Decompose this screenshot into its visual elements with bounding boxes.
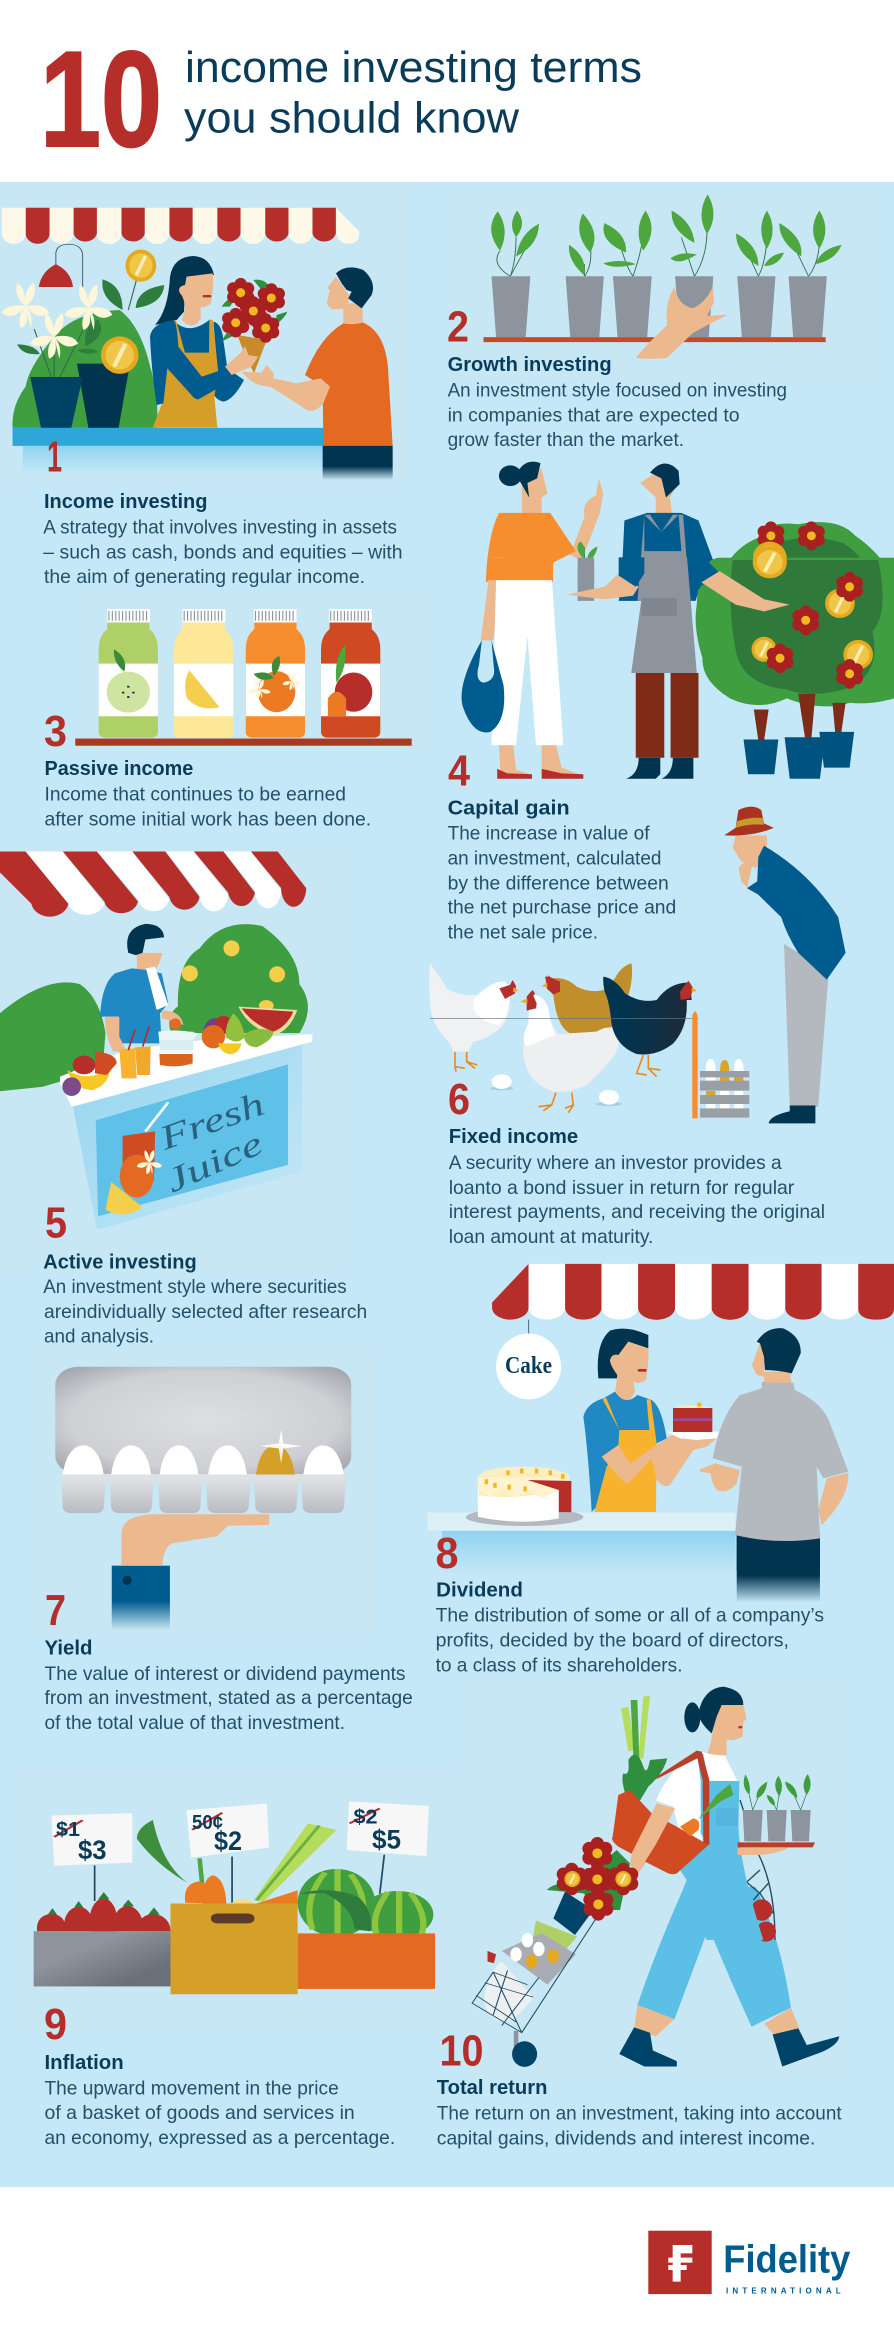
title: 10 xyxy=(40,23,162,175)
panel: term 5 active investing xyxy=(0,845,367,1348)
logo: Fidelity International xyxy=(648,2231,851,2295)
description: – such as cash, bonds and equities – with xyxy=(43,541,403,563)
price tags: 50¢ xyxy=(192,1812,223,1834)
panel: term 2 growth investing xyxy=(447,191,873,451)
number 3: 3 xyxy=(44,707,67,756)
heading: Yield xyxy=(44,1637,92,1660)
price tags: $5 xyxy=(372,1824,401,1854)
title: income investing terms xyxy=(185,43,642,92)
illustration: shopper with trolley xyxy=(472,1687,839,2067)
illustration: flower stall xyxy=(0,208,393,480)
number 4: 4 xyxy=(448,746,470,795)
description: of a basket of goods and services in xyxy=(44,2102,355,2124)
description: and analysis. xyxy=(44,1326,154,1348)
price tags: $2 xyxy=(214,1826,242,1856)
logo: Fidelity International: INTERNATIONAL xyxy=(726,2286,841,2295)
logo: Fidelity International: Fidelity xyxy=(723,2238,851,2281)
illustration: egg carton on hand xyxy=(55,1367,351,1630)
illustration: market crates xyxy=(34,1801,435,1994)
number 5: 5 xyxy=(45,1199,67,1248)
panel: term 4 capital gain xyxy=(448,462,894,944)
sign lettering: Fresh xyxy=(154,1086,269,1158)
description: The distribution of some or all of a company’s xyxy=(436,1604,824,1626)
price tags xyxy=(56,1806,401,1865)
number 7: 7 xyxy=(45,1586,66,1635)
description xyxy=(44,2078,395,2149)
price tags: $2 xyxy=(354,1806,378,1828)
illustration: farmer and hens xyxy=(429,807,846,1123)
heading: Income investing xyxy=(44,490,208,513)
heading: Dividend xyxy=(436,1578,523,1601)
description xyxy=(436,1604,824,1676)
description xyxy=(44,1663,413,1734)
description: the net sale price. xyxy=(448,922,598,944)
description: An investment style where securities xyxy=(43,1276,347,1298)
illustration: cake shop xyxy=(428,1264,894,1602)
description: in companies that are expected to xyxy=(448,404,740,426)
description xyxy=(43,1276,367,1348)
description: areindividually selected after research xyxy=(44,1301,367,1323)
number 6: 6 xyxy=(448,1075,470,1124)
description: grow faster than the market. xyxy=(448,429,684,451)
heading: Active investing xyxy=(43,1251,197,1274)
panel: term 10 total return xyxy=(437,1678,850,2149)
description: Income that continues to be earned xyxy=(44,784,346,806)
description xyxy=(448,822,676,944)
description: capital gains, dividends and interest income. xyxy=(437,2127,815,2149)
description: an economy, expressed as a percentage. xyxy=(44,2127,395,2149)
panel: term 1 income investing xyxy=(0,185,408,588)
illustration: juice stand xyxy=(0,851,312,1230)
description: to a class of its shareholders. xyxy=(436,1654,682,1676)
description xyxy=(449,1152,825,1248)
description: loan amount at maturity. xyxy=(449,1226,653,1248)
description xyxy=(437,2102,842,2149)
heading: Growth investing xyxy=(448,353,612,376)
description: an investment, calculated xyxy=(448,847,661,869)
title: you should know xyxy=(184,94,519,142)
description: after some initial work has been done. xyxy=(44,809,371,831)
description: loanto a bond issuer in return for regular xyxy=(449,1177,795,1199)
heading: Passive income xyxy=(44,757,193,780)
description xyxy=(448,380,787,451)
description: the aim of generating regular income. xyxy=(44,566,365,588)
panel: term 6 fixed income xyxy=(429,807,846,1248)
number 1: 1 xyxy=(47,432,62,482)
illustration: plants on shelf xyxy=(484,194,842,359)
price tags: $1 xyxy=(56,1819,80,1841)
sign lettering: Juice xyxy=(160,1125,268,1200)
price tags: $3 xyxy=(78,1835,106,1865)
description xyxy=(44,784,371,831)
title xyxy=(40,23,642,175)
sign lettering xyxy=(154,1086,269,1200)
heading: Total return xyxy=(437,2076,547,2099)
number 8: 8 xyxy=(436,1529,458,1578)
illustration: man with money tree xyxy=(462,462,894,779)
panel: term 3 passive income xyxy=(44,596,434,831)
description: of the total value of that investment. xyxy=(44,1712,345,1734)
description: profits, decided by the board of directors, xyxy=(436,1629,789,1651)
description xyxy=(43,516,403,588)
description: interest payments, and receiving the original xyxy=(449,1201,825,1223)
panel: term 9 inflation xyxy=(16,1770,461,2149)
description: by the difference between xyxy=(448,872,669,894)
description: The upward movement in the price xyxy=(44,2078,339,2100)
heading: Inflation xyxy=(44,2051,124,2074)
heading: Fixed income xyxy=(449,1125,578,1148)
description: An investment style focused on investing xyxy=(448,380,787,402)
number 10: 10 xyxy=(440,2026,484,2075)
description: The value of interest or dividend payments xyxy=(44,1663,406,1685)
shop sign: Cake xyxy=(505,1353,552,1379)
panel: term 8 dividend xyxy=(428,1264,894,1676)
panel: term 7 yield xyxy=(28,1349,413,1734)
description: A security where an investor provides a xyxy=(449,1152,782,1174)
heading: Capital gain xyxy=(448,796,570,819)
illustration: juice bottles xyxy=(75,609,412,746)
description: The increase in value of xyxy=(448,822,650,844)
description: A strategy that involves investing in assets xyxy=(43,516,397,538)
description: The return on an investment, taking into account xyxy=(437,2102,842,2124)
number 9: 9 xyxy=(44,2000,67,2049)
description: from an investment, stated as a percentage xyxy=(44,1687,413,1709)
number 2: 2 xyxy=(447,302,469,351)
description: the net purchase price and xyxy=(448,896,676,918)
